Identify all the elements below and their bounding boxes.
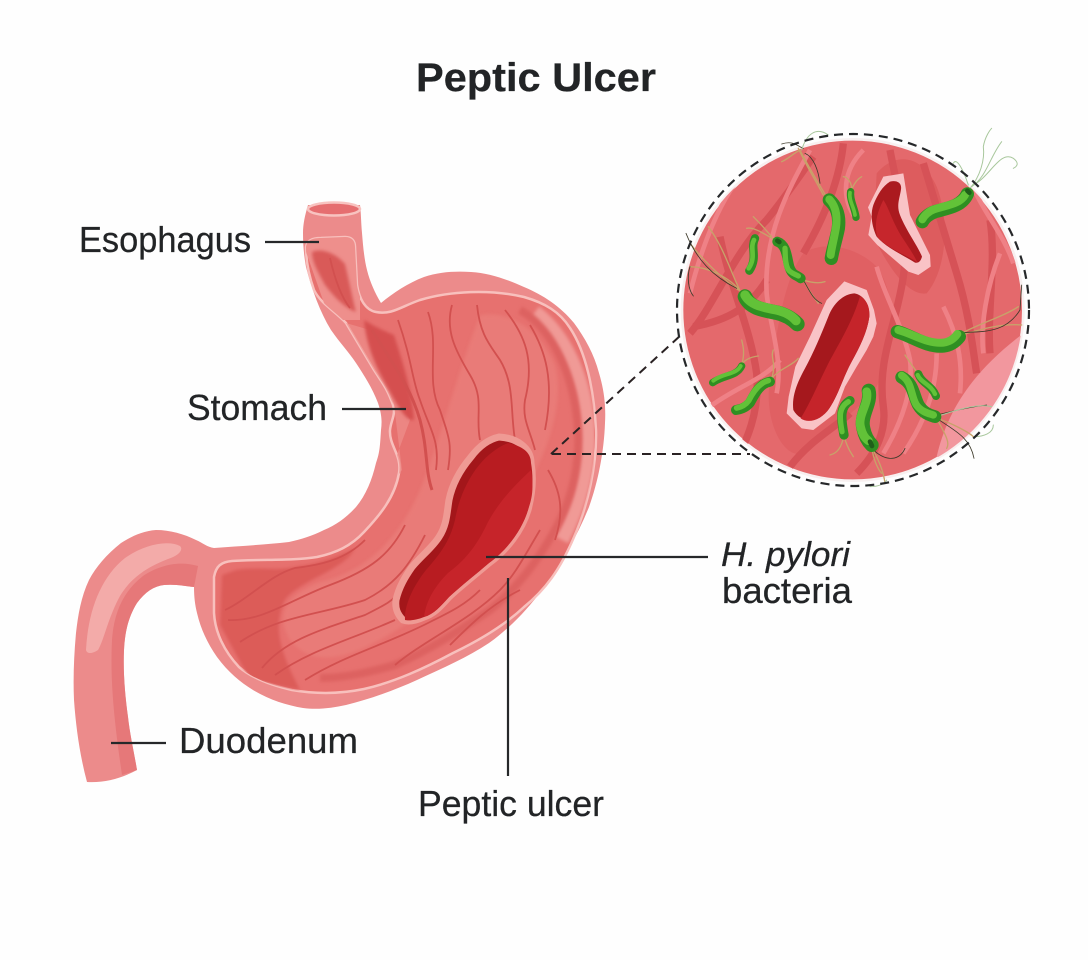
magnifier dashed outline <box>677 134 1029 486</box>
esophagus lining <box>306 237 360 320</box>
leader line <box>111 742 166 744</box>
large ulcer crater <box>793 293 869 420</box>
bacterium dark bodies <box>713 192 967 445</box>
label text: Stomach <box>187 387 327 428</box>
stomach illustration <box>74 202 605 782</box>
esophagus dark folds <box>312 250 356 312</box>
bacterium highlights <box>713 193 965 441</box>
large ulcer rim <box>787 281 877 430</box>
right side mottled band <box>320 310 578 678</box>
small ulcer rim <box>868 173 931 275</box>
leader line <box>342 408 406 410</box>
label text: Esophagus <box>79 219 251 260</box>
leader line <box>265 241 319 243</box>
ulcer crater <box>396 437 532 621</box>
right side pale band <box>535 312 588 540</box>
magnified view connector <box>551 335 750 454</box>
ulcer main floor <box>405 443 532 620</box>
large ulcer floor <box>801 296 869 421</box>
stomach outer wall with esophagus and duodenum <box>74 205 605 782</box>
infographic: peptic ulcer <box>74 62 1030 824</box>
lower-left dark mottled region <box>220 548 355 690</box>
stomach interior folds <box>220 235 588 690</box>
fold lines <box>225 258 560 680</box>
leader line <box>507 578 509 776</box>
label text: Peptic ulcer <box>418 783 604 824</box>
small ulcer <box>868 173 931 275</box>
H. pylori bacteria <box>713 191 969 446</box>
leader line <box>486 556 708 558</box>
small ulcer crater <box>872 181 922 263</box>
dashed line to circle left <box>551 335 681 454</box>
tissue fibres <box>690 143 1030 480</box>
flagella <box>686 128 1022 487</box>
magnified circle <box>682 128 1030 487</box>
label: H. pylori bacteria <box>486 536 853 611</box>
lesser curvature dark patch <box>364 320 414 420</box>
ulcer rim <box>396 437 532 621</box>
tissue disc <box>682 139 1023 481</box>
duodenum highlight <box>86 543 181 653</box>
duodenum shading <box>111 564 198 775</box>
title: Peptic Ulcer <box>416 56 656 100</box>
bacterium end caps <box>777 191 969 446</box>
label text: Duodenum <box>179 720 358 761</box>
dashed line to circle bottom <box>552 453 750 455</box>
label text line 2: bacteria <box>722 570 853 611</box>
label text line 1: H. pylori <box>721 536 851 574</box>
ulcer bright floor <box>424 470 532 617</box>
stomach lumen <box>214 237 596 693</box>
esophagus opening <box>308 202 360 216</box>
lesser curvature lining <box>346 323 410 474</box>
small ulcer floor <box>876 200 917 262</box>
lighter lobe <box>283 314 558 658</box>
large ulcer <box>787 281 877 430</box>
